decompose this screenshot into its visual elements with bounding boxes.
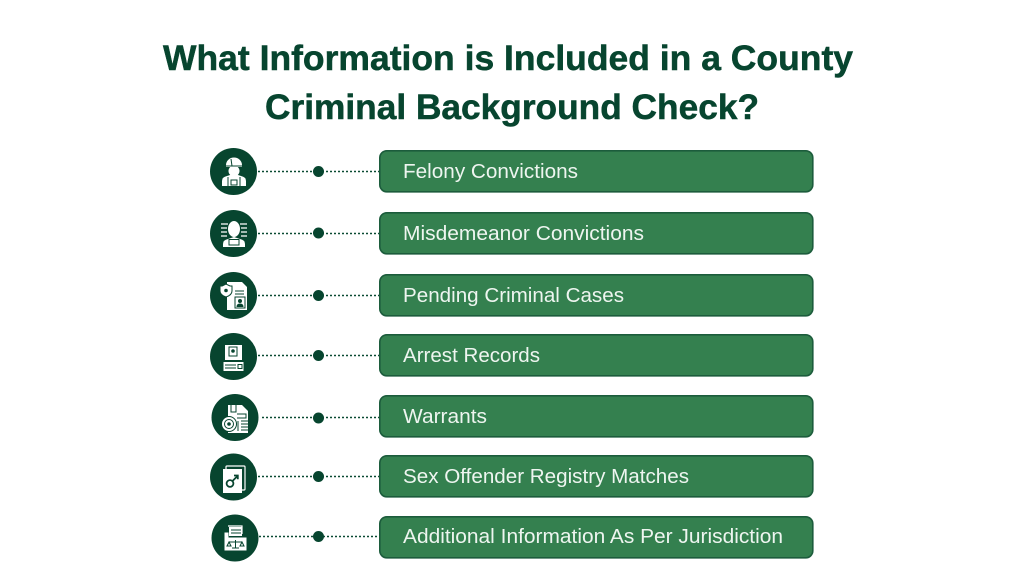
connector with dot <box>259 531 379 542</box>
label bar: Arrest Records <box>403 345 540 367</box>
label bar <box>380 456 813 497</box>
connector with dot <box>258 166 379 177</box>
row: warrants <box>212 394 813 441</box>
row: additional information as per jurisdiction <box>212 514 813 562</box>
row: felony convictions <box>210 148 813 195</box>
row: sex offender registry matches <box>210 454 813 500</box>
icon: worker in cap <box>210 148 257 195</box>
label bar <box>380 396 813 437</box>
icon: arrest record sheet <box>210 333 257 380</box>
label bar <box>380 275 813 316</box>
row: misdemeanor convictions <box>210 210 813 257</box>
label bar: Felony Convictions <box>403 161 578 183</box>
label bar: Pending Criminal Cases <box>403 285 624 307</box>
label bar: Warrants <box>403 406 487 428</box>
label bar <box>380 151 813 192</box>
label bar <box>380 517 813 558</box>
row: arrest records <box>210 333 813 380</box>
label bar <box>380 213 813 254</box>
label bar: Misdemeanor Convictions <box>403 223 644 245</box>
icon: badge and case file <box>210 272 257 319</box>
icon: warrant document with seal <box>212 394 258 441</box>
label bar: Additional Information As Per Jurisdiction <box>403 526 783 548</box>
label bar: Sex Offender Registry Matches <box>403 466 689 488</box>
connector with dot <box>258 350 379 361</box>
connector with dot <box>258 228 379 238</box>
label bar <box>380 335 813 376</box>
title: What Information is Included in a County <box>163 38 853 78</box>
connector with dot <box>258 471 379 482</box>
connector with dot <box>262 412 379 424</box>
connector with dot <box>258 290 379 301</box>
title <box>163 38 853 127</box>
row: pending criminal cases <box>210 272 813 319</box>
title: Criminal Background Check? <box>265 87 759 127</box>
icon: mugshot <box>210 210 257 257</box>
icon: folder with scales <box>212 514 258 562</box>
icon: stacked papers with male symbol <box>210 454 257 500</box>
